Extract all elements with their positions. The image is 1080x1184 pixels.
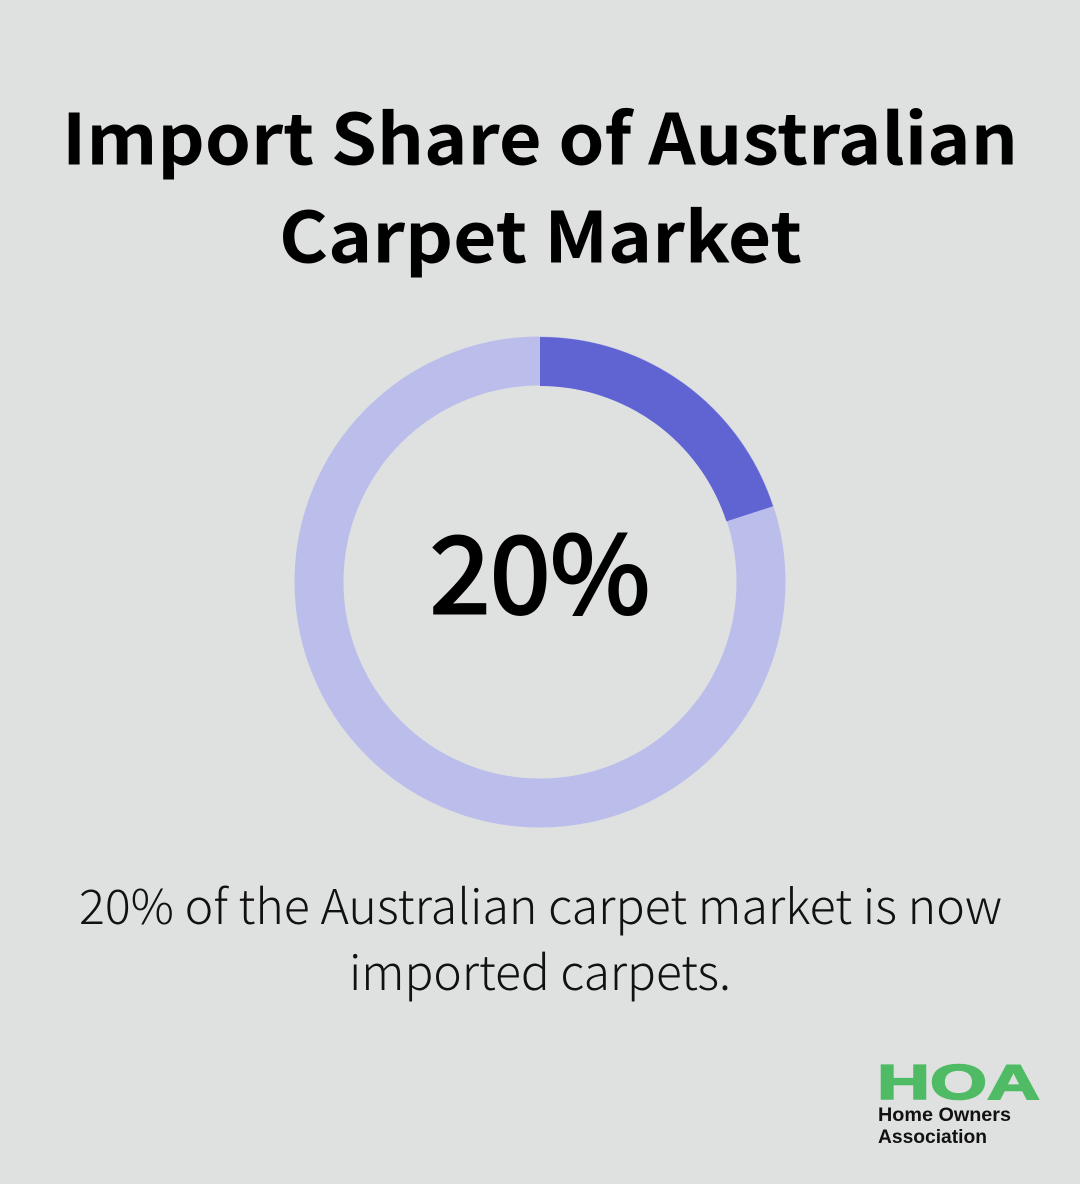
title [62, 84, 1018, 284]
description text: 20% of the Australian carpet market is now [79, 868, 1002, 938]
logo: HOA Home Owners Association: HOA [877, 1056, 1040, 1110]
donut chart: 20% share [319, 337, 773, 803]
logo: HOA Home Owners Association: Association [878, 1127, 987, 1148]
title: Import Share of Australian [62, 84, 1018, 186]
description text: imported carpets. [349, 934, 731, 1004]
logo: HOA Home Owners Association: Home Owners [878, 1105, 1011, 1126]
center value: 20% [430, 490, 650, 644]
description text [79, 868, 1002, 1004]
title: Carpet Market [279, 182, 802, 284]
logo: HOA Home Owners Association [877, 1056, 1040, 1148]
